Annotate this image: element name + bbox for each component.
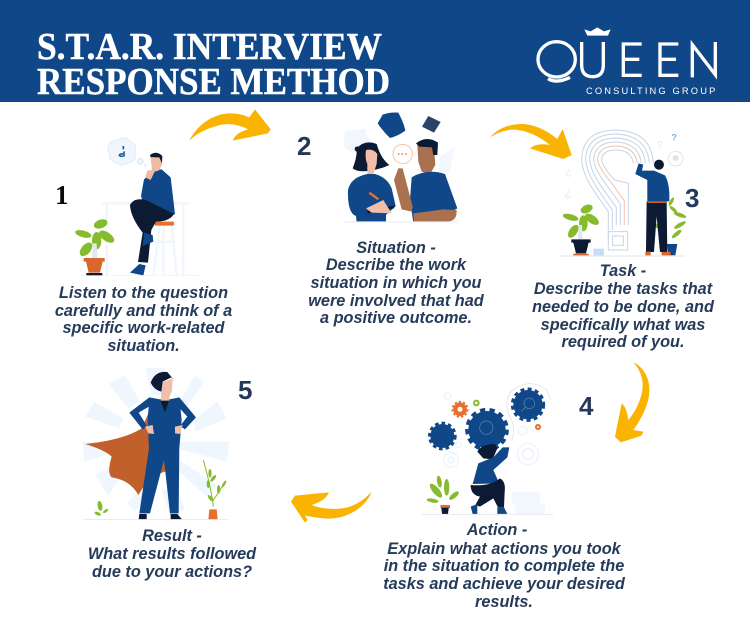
stool seat bbox=[155, 222, 174, 226]
text: situation: a positive outcome. bbox=[320, 309, 472, 327]
title: RESPONSE METHOD bbox=[37, 61, 390, 103]
arrow 1 to 2 bbox=[189, 109, 271, 141]
man bbox=[417, 145, 435, 174]
gear orange large bbox=[455, 405, 465, 414]
illustration: woman with gears bbox=[422, 384, 553, 514]
plant right bbox=[203, 460, 225, 507]
header band bbox=[0, 0, 750, 102]
text: result bbox=[88, 527, 257, 581]
text: action: tasks and achieve your desired bbox=[383, 575, 626, 593]
logo wordmark bbox=[538, 42, 715, 81]
text: step 1 bbox=[55, 284, 232, 355]
plant left bbox=[94, 501, 109, 517]
logo tagline: CONSULTING GROUP bbox=[586, 86, 715, 96]
arrow 2 to 3 bbox=[490, 124, 572, 159]
text: task: Task - bbox=[600, 262, 646, 280]
logo crown bbox=[584, 27, 611, 36]
title: S.T.A.R. INTERVIEW bbox=[37, 26, 382, 68]
text: result: Result - bbox=[142, 527, 202, 545]
cape bbox=[85, 412, 181, 495]
illustration: maze question mark bbox=[560, 130, 687, 256]
text: action: Explain what actions you took bbox=[387, 540, 622, 558]
text: situation bbox=[308, 239, 485, 327]
gear bulb bbox=[468, 411, 506, 448]
blue box bbox=[593, 249, 604, 256]
background shapes bbox=[343, 128, 455, 173]
sunburst bbox=[83, 368, 229, 517]
illustration: superhero woman bbox=[83, 368, 229, 520]
small question marks: ¿ bbox=[564, 185, 572, 200]
plant bbox=[426, 475, 460, 504]
text: situation: Describe the work bbox=[326, 256, 467, 274]
plant right bbox=[653, 197, 687, 239]
maze bbox=[582, 130, 653, 250]
illustration: thinking man bbox=[74, 138, 203, 275]
text: action: results. bbox=[475, 593, 533, 611]
drawn curve bbox=[507, 384, 551, 441]
plant bbox=[74, 218, 116, 258]
text: action bbox=[383, 521, 626, 611]
gear orange small bbox=[536, 425, 540, 429]
arrow 3 to 4 bbox=[615, 362, 649, 442]
text: task: required of you. bbox=[561, 333, 685, 351]
woman bbox=[477, 444, 497, 459]
light gears and boxes bbox=[444, 393, 539, 467]
text: task: Describe the tasks that bbox=[534, 280, 713, 298]
text: task: needed to be done, and bbox=[532, 298, 715, 316]
step number 4: 4 bbox=[579, 391, 594, 421]
text: action: in the situation to complete the bbox=[384, 557, 624, 575]
logo: Queen Consulting Group bbox=[538, 27, 715, 96]
text: situation: situation in which you bbox=[311, 274, 482, 292]
small question marks: ¿ bbox=[565, 166, 572, 178]
thought bubble bbox=[107, 138, 136, 165]
text: step 1: Listen to the question bbox=[59, 284, 228, 302]
text: result: due to your actions? bbox=[92, 563, 252, 581]
text: task: specifically what was bbox=[541, 316, 705, 334]
step number 5: 5 bbox=[238, 375, 252, 405]
text: situation: were involved that had bbox=[308, 292, 485, 310]
text: step 1: carefully and think of a bbox=[55, 302, 232, 320]
small question marks bbox=[564, 133, 677, 200]
title bbox=[37, 26, 390, 103]
text: result: What results followed bbox=[88, 545, 257, 563]
gear chart bbox=[430, 424, 454, 448]
text: step 1: specific work-related bbox=[63, 319, 226, 337]
text: task bbox=[532, 262, 715, 351]
step number 3: 3 bbox=[685, 183, 699, 213]
woman bbox=[353, 142, 389, 171]
arrow 4 to 5 bbox=[291, 492, 372, 523]
gear green bbox=[474, 401, 479, 405]
table bbox=[77, 203, 203, 275]
head bbox=[160, 378, 173, 401]
gear search bbox=[513, 390, 543, 419]
illustration: two people talking bbox=[343, 113, 458, 222]
lightbulb bubble bbox=[668, 151, 683, 166]
man from behind bbox=[646, 202, 667, 252]
man bbox=[141, 169, 175, 222]
shoes bbox=[139, 514, 182, 519]
text: situation: Situation - bbox=[356, 239, 436, 257]
text: action: Action - bbox=[466, 521, 527, 539]
small question marks: ? bbox=[657, 139, 664, 151]
text: step 1: situation. bbox=[107, 337, 180, 355]
plant left bbox=[562, 203, 601, 240]
step number 1: 1 bbox=[55, 180, 68, 210]
small question marks: ? bbox=[671, 133, 677, 143]
suit bbox=[139, 397, 182, 513]
speech bubble bbox=[393, 144, 412, 164]
floating notes bbox=[378, 113, 405, 138]
step number 2: 2 bbox=[297, 131, 311, 161]
